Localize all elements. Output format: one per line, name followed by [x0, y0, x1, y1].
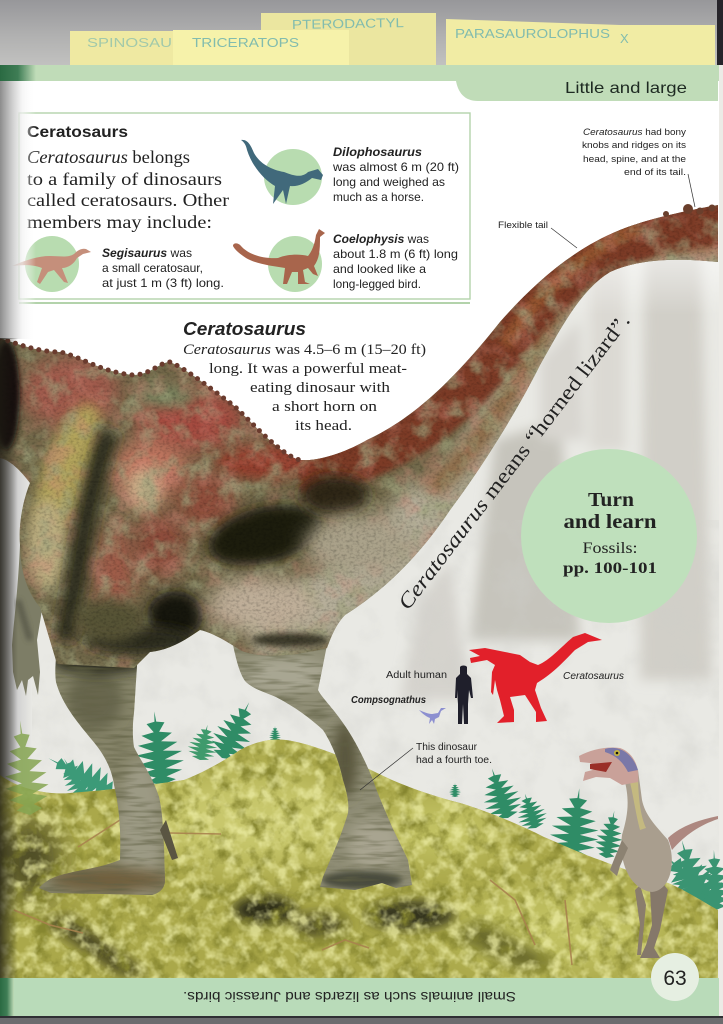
page number	[651, 953, 699, 1001]
Coelophysis text: and looked like a	[333, 262, 426, 276]
callout: bony knobs: Ceratosaurus had bony	[583, 127, 686, 138]
dark book edge top right	[717, 0, 723, 66]
underside of tail	[250, 261, 718, 630]
mossy mound	[0, 735, 719, 980]
callout circle: Turn and learn: Turn	[588, 489, 634, 511]
callout: fourth toe: This dinosaur	[416, 742, 478, 753]
raised arm	[12, 545, 42, 696]
body and tail	[0, 200, 723, 680]
callout: fourth toe: had a fourth toe.	[416, 755, 492, 766]
section tab	[456, 81, 718, 101]
callout: bony knobs	[582, 127, 695, 207]
Ceratosaurus text block	[183, 319, 426, 434]
callout circle: Turn and learn	[521, 449, 697, 623]
callout: bony knobs: head, spine, and at the	[583, 154, 686, 165]
callout circle: Turn and learn: pp. 100-101	[563, 560, 657, 577]
ferns behind the mound	[41, 694, 723, 923]
label: Compsognathus: Compsognathus	[351, 695, 426, 706]
sticky note: Spinosaurus: SPINOSAU	[87, 35, 172, 50]
description: Ceratosaurus was 4.5–6 m (15–20 ft)	[183, 342, 426, 358]
Coelophysis text: Coelophysis was	[333, 232, 429, 246]
panel heading: Ceratosaurs	[27, 124, 128, 141]
Dilophosaurus text	[332, 145, 459, 204]
callout: flexible tail: Flexible tail	[498, 220, 548, 231]
sticky note: Triceratops: TRICERATOPS	[192, 35, 299, 50]
panel: Ceratosaurs	[12, 113, 470, 304]
icon: Segisaurus	[12, 236, 91, 292]
colour mottling	[0, 200, 723, 680]
Segisaurus text: a small ceratosaur,	[102, 261, 203, 275]
Segisaurus text: at just 1 m (3 ft) long.	[102, 276, 224, 290]
Dilophosaurus text: much as a horse.	[333, 190, 424, 204]
callout: bony knobs: end of its tail.	[624, 167, 686, 178]
callout: fourth toe	[360, 742, 492, 790]
back ridge bumps	[0, 338, 300, 460]
Dilophosaurus text: Dilophosaurus	[333, 145, 422, 159]
main illustration: Ceratosaurus	[0, 200, 723, 900]
sticky note: Parasaurolophus: X	[620, 31, 629, 46]
description	[183, 342, 426, 434]
spiky fourth toe	[160, 820, 178, 860]
dark shadows	[65, 430, 110, 640]
description: long. It was a powerful meat-	[209, 361, 407, 377]
pale flank	[207, 577, 317, 633]
icon: Coelophysis	[233, 229, 325, 292]
label: Ceratosaurus: Ceratosaurus	[563, 671, 624, 682]
callout: flexible tail	[498, 220, 577, 248]
book bottom edge	[0, 1016, 723, 1024]
scanner background behind the book	[0, 0, 723, 70]
page number: 63	[663, 967, 687, 990]
sticky note: Spinosaurus	[70, 31, 175, 67]
callout circle: Turn and learn: Fossils:	[582, 540, 638, 557]
hip	[30, 398, 106, 529]
silhouette: Compsognathus	[419, 708, 446, 724]
label: adult human: Adult human	[386, 670, 447, 681]
book gutter shadow	[0, 81, 36, 339]
panel intro text: Ceratosaurus belongs	[27, 147, 190, 167]
Dilophosaurus text: was almost 6 m (20 ft)	[332, 160, 459, 174]
panel intro text: called ceratosaurs. Other	[27, 190, 229, 210]
Dilophosaurus text: long and weighed as	[333, 175, 445, 189]
description: a short horn on	[272, 399, 378, 415]
sticky note: Triceratops	[173, 30, 349, 67]
Segisaurus text: Segisaurus was	[102, 246, 192, 260]
description: its head.	[295, 418, 352, 434]
Coelophysis text: long-legged bird.	[333, 277, 421, 291]
diagonal caption along the tail: Ceratosaurus means “horned lizard”.	[393, 309, 635, 614]
header band	[0, 65, 719, 101]
footer band	[0, 953, 719, 1016]
panel intro text: members may include:	[27, 212, 212, 232]
tail tip knobs	[663, 204, 716, 217]
size comparison chart	[351, 633, 624, 724]
Coelophysis text: about 1.8 m (6 ft) long	[333, 247, 458, 261]
callout circle: Turn and learn: and learn	[564, 511, 656, 533]
description: eating dinosaur with	[250, 380, 391, 396]
panel intro text	[27, 147, 229, 232]
sticky note: Parasaurolophus: PARASAUROLOPHUS	[455, 26, 610, 41]
upside-down quiz answer: Small animals such as lizards and Jurassic birds.	[183, 989, 516, 1005]
sticky note tabs	[70, 13, 715, 67]
small running dinosaur, lower right	[579, 747, 718, 958]
page gutter under the dinosaur	[0, 440, 32, 980]
white paper above the dinosaur's back	[0, 82, 719, 470]
sticky note: Parasaurolophus	[446, 19, 715, 67]
sticky note: Pterodactyl: PTERODACTYL	[292, 15, 404, 32]
hind leg, left	[39, 660, 165, 895]
sticky note: Pterodactyl	[261, 13, 436, 67]
left fronds	[0, 718, 51, 817]
back reds	[20, 356, 120, 428]
hind leg, right	[233, 646, 412, 890]
heading: Ceratosaurus	[183, 319, 306, 339]
fallen twigs	[14, 820, 572, 965]
icon: Dilophosaurus	[241, 140, 323, 205]
section heading: Little and large	[565, 80, 687, 97]
silhouette: Ceratosaurus	[469, 633, 602, 723]
callout: bony knobs: knobs and ridges on its	[582, 140, 686, 151]
panel intro text: to a family of dinosaurs	[27, 169, 222, 189]
silhouette: adult human	[455, 666, 473, 724]
tree trunks	[400, 215, 712, 700]
Segisaurus text	[102, 246, 224, 290]
top red band	[300, 224, 723, 472]
Coelophysis text	[333, 232, 458, 291]
mid tail transition	[430, 244, 718, 490]
